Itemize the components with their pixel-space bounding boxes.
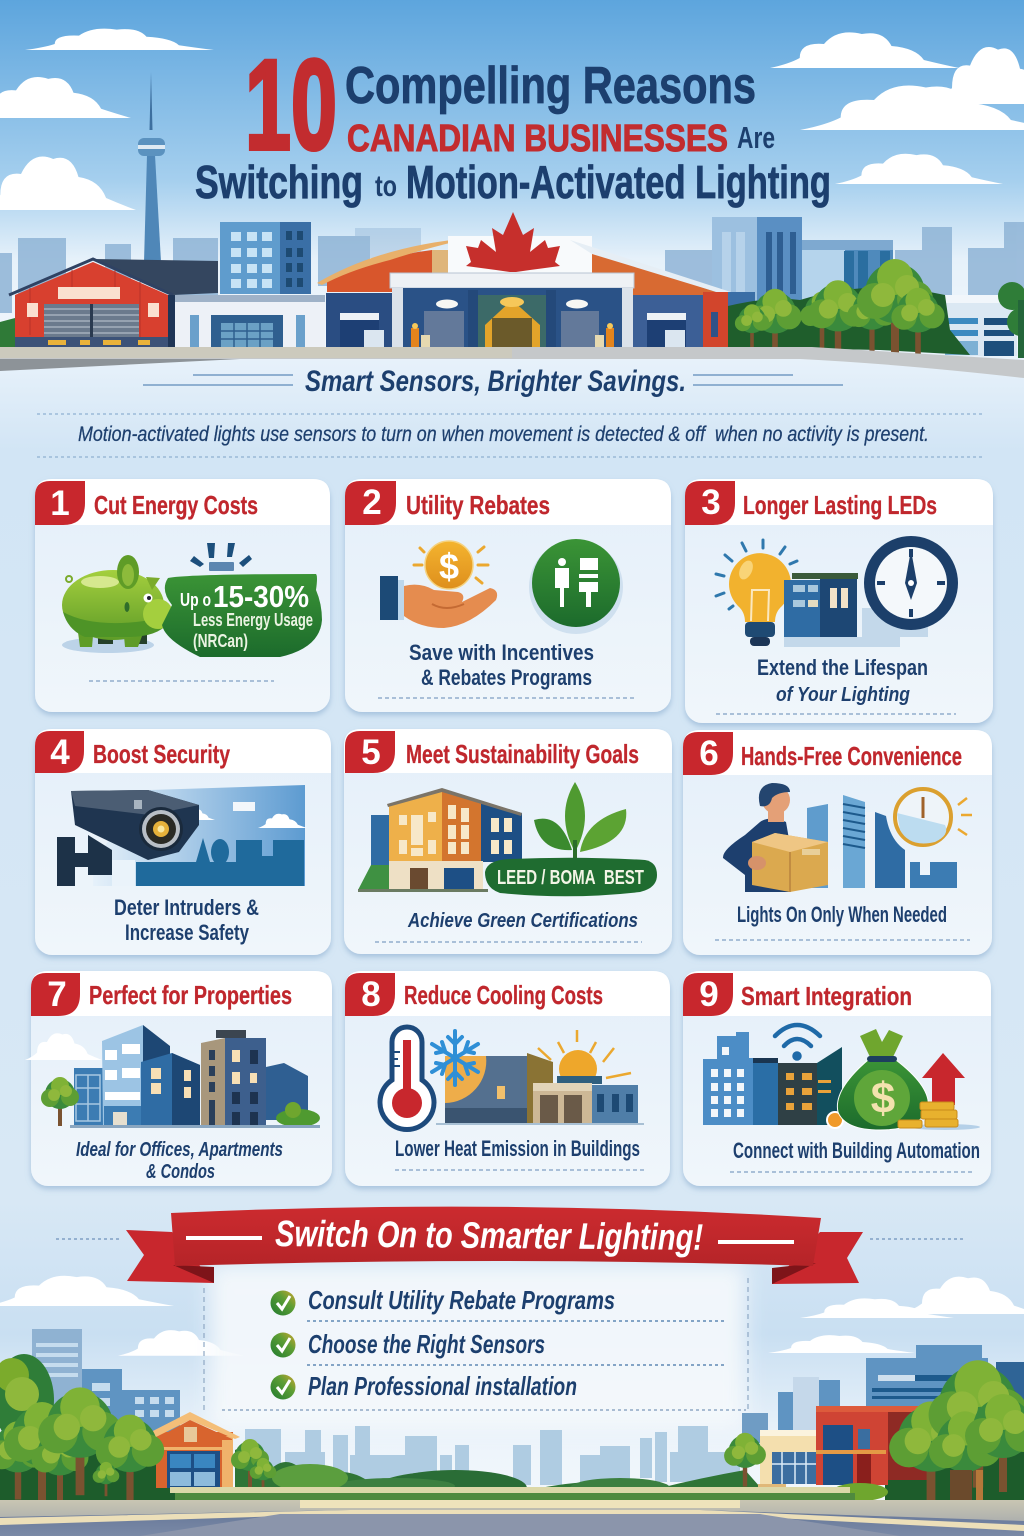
icon: hand with coin <box>380 541 497 628</box>
heading: Perfect for Properties <box>89 980 292 1010</box>
icon: light bulb <box>716 540 797 646</box>
caption: Increase Safety <box>125 920 250 945</box>
heading: Meet Sustainability Goals <box>406 739 639 769</box>
background: lower sky <box>0 1200 1024 1536</box>
title <box>195 34 831 208</box>
title to: to <box>375 170 397 203</box>
caption <box>114 895 259 945</box>
number badge <box>31 973 80 1016</box>
number badge <box>345 731 395 773</box>
caption: Extend the Lifespan <box>757 655 928 680</box>
caption <box>757 655 928 706</box>
left tree <box>0 318 15 347</box>
savings badge: 15-30% <box>213 579 309 614</box>
certification ribbon <box>485 858 657 896</box>
caption: Deter Intruders & <box>114 895 259 920</box>
icon: thermometer <box>380 1027 434 1129</box>
icon: clock <box>864 536 958 630</box>
item 2 <box>270 1329 545 1359</box>
heading: Boost Security <box>93 739 230 769</box>
panel 9: smart integration <box>683 971 991 1186</box>
ground strip <box>170 1487 850 1493</box>
caption: Ideal for Offices, Apartments <box>76 1139 283 1161</box>
heading: Utility Rebates <box>406 490 550 520</box>
item 1: Consult Utility Rebate Programs <box>308 1285 615 1315</box>
number badge: 4 <box>50 733 70 772</box>
icon: security camera <box>57 790 199 886</box>
icon: building <box>784 573 928 647</box>
panel 1: cut energy costs <box>35 479 330 712</box>
title are: Are <box>737 120 775 155</box>
icon: piggy bank <box>62 555 173 653</box>
icon: city and clock <box>807 789 972 888</box>
title switching: Switching <box>195 156 363 208</box>
title line 2: CANADIAN BUSINESSES <box>347 118 728 160</box>
portico <box>390 273 634 288</box>
icon: snowflake <box>432 1031 478 1085</box>
caption <box>409 640 594 690</box>
caption: Save with Incentives <box>409 640 594 665</box>
caption: Achieve Green Certifications <box>407 910 638 932</box>
banner <box>56 1207 966 1284</box>
number badge <box>345 481 396 525</box>
ribbon body <box>171 1207 821 1266</box>
lower scene with trees and buildings <box>0 1354 1024 1509</box>
road <box>0 347 1024 378</box>
left house <box>145 1412 240 1488</box>
red barn <box>9 259 218 347</box>
savings badge: Up o <box>180 590 211 610</box>
number badge <box>685 481 735 525</box>
certification ribbon: LEED / BOMA BEST <box>497 867 644 889</box>
panel 2: utility rebates <box>345 479 671 712</box>
ribbon left tail <box>126 1230 214 1283</box>
icon: smart buildings <box>703 1032 842 1125</box>
number badge <box>683 732 733 775</box>
icon: growth arrow and coins <box>898 1053 980 1130</box>
title line 1: Compelling Reasons <box>345 57 756 115</box>
number badge <box>345 973 395 1016</box>
number badge <box>35 731 84 773</box>
closing panel backdrop <box>210 1265 745 1430</box>
panel 6: hands-free <box>683 730 992 955</box>
hero buildings <box>0 212 1024 378</box>
icon: wifi <box>775 1025 820 1058</box>
caption: Lower Heat Emission in Buildings <box>395 1136 640 1161</box>
maple leaf <box>466 212 560 272</box>
title number: 10 <box>245 34 337 177</box>
item 3 <box>270 1371 577 1401</box>
checklist <box>204 1278 748 1410</box>
CN tower <box>138 72 165 262</box>
icon: buildings with sun <box>436 1030 644 1125</box>
number badge: 7 <box>47 975 67 1014</box>
number badge <box>35 481 85 525</box>
lower clouds <box>0 1276 1024 1356</box>
white building <box>175 295 325 347</box>
caption: & Condos <box>146 1161 215 1183</box>
heading: Reduce Cooling Costs <box>404 980 603 1010</box>
background: sky top <box>0 0 1024 360</box>
number badge: 6 <box>699 734 719 773</box>
central building <box>317 212 755 347</box>
right buildings <box>758 1406 929 1487</box>
scene: city view <box>93 785 307 886</box>
savings badge <box>162 574 322 657</box>
number badge: 1 <box>50 484 70 523</box>
caption: of Your Lighting <box>776 684 910 706</box>
number badge: 5 <box>361 733 381 772</box>
number badge: 3 <box>701 483 721 522</box>
panel 4: boost security <box>35 729 331 955</box>
caption: & Rebates Programs <box>421 665 592 690</box>
lower road <box>0 1500 1024 1536</box>
icon: green incentive badge <box>529 539 623 634</box>
number badge <box>683 973 733 1016</box>
heading: Cut Energy Costs <box>94 490 258 520</box>
skyline top <box>0 72 1024 313</box>
clouds top <box>0 29 1024 210</box>
ribbon right tail <box>772 1232 863 1284</box>
tagline: Smart Sensors, Brighter Savings. <box>305 365 686 398</box>
number badge: 9 <box>699 975 719 1014</box>
savings badge: Less Energy Usage <box>193 610 313 630</box>
panel 8: cooling <box>345 971 670 1186</box>
icon: plant <box>534 782 626 862</box>
banner text: Switch On to Smarter Lighting! <box>275 1213 703 1258</box>
panel 7: properties <box>25 971 332 1186</box>
icon: money bag: $ <box>871 1074 895 1123</box>
tree groups <box>0 1354 1024 1509</box>
number badge: 8 <box>361 975 381 1014</box>
right trees and office <box>728 259 1024 359</box>
icon: alert rays <box>190 543 252 571</box>
caption <box>76 1139 283 1183</box>
item 2: Choose the Right Sensors <box>308 1329 545 1359</box>
lower skyline <box>32 1329 1024 1486</box>
icon: hand with coin: $ <box>439 546 459 587</box>
heading: Smart Integration <box>741 981 912 1011</box>
blue tower left <box>220 222 311 294</box>
icon: property buildings <box>25 1025 320 1128</box>
number badge: 2 <box>362 483 382 522</box>
item 3: Plan Professional installation <box>308 1371 577 1401</box>
heading: Longer Lasting LEDs <box>743 490 937 520</box>
icon: buildings <box>358 788 522 892</box>
background: middle <box>0 347 1024 1207</box>
blue tower right <box>712 217 893 312</box>
icon: money bag <box>827 1029 928 1130</box>
title motion: Motion-Activated Lighting <box>406 156 831 208</box>
savings badge: (NRCan) <box>193 631 248 651</box>
item 1 <box>270 1285 615 1316</box>
icon: delivery person <box>723 783 828 892</box>
panel 5: sustainability <box>344 729 672 954</box>
panel 3: longer lasting leds <box>685 479 993 723</box>
